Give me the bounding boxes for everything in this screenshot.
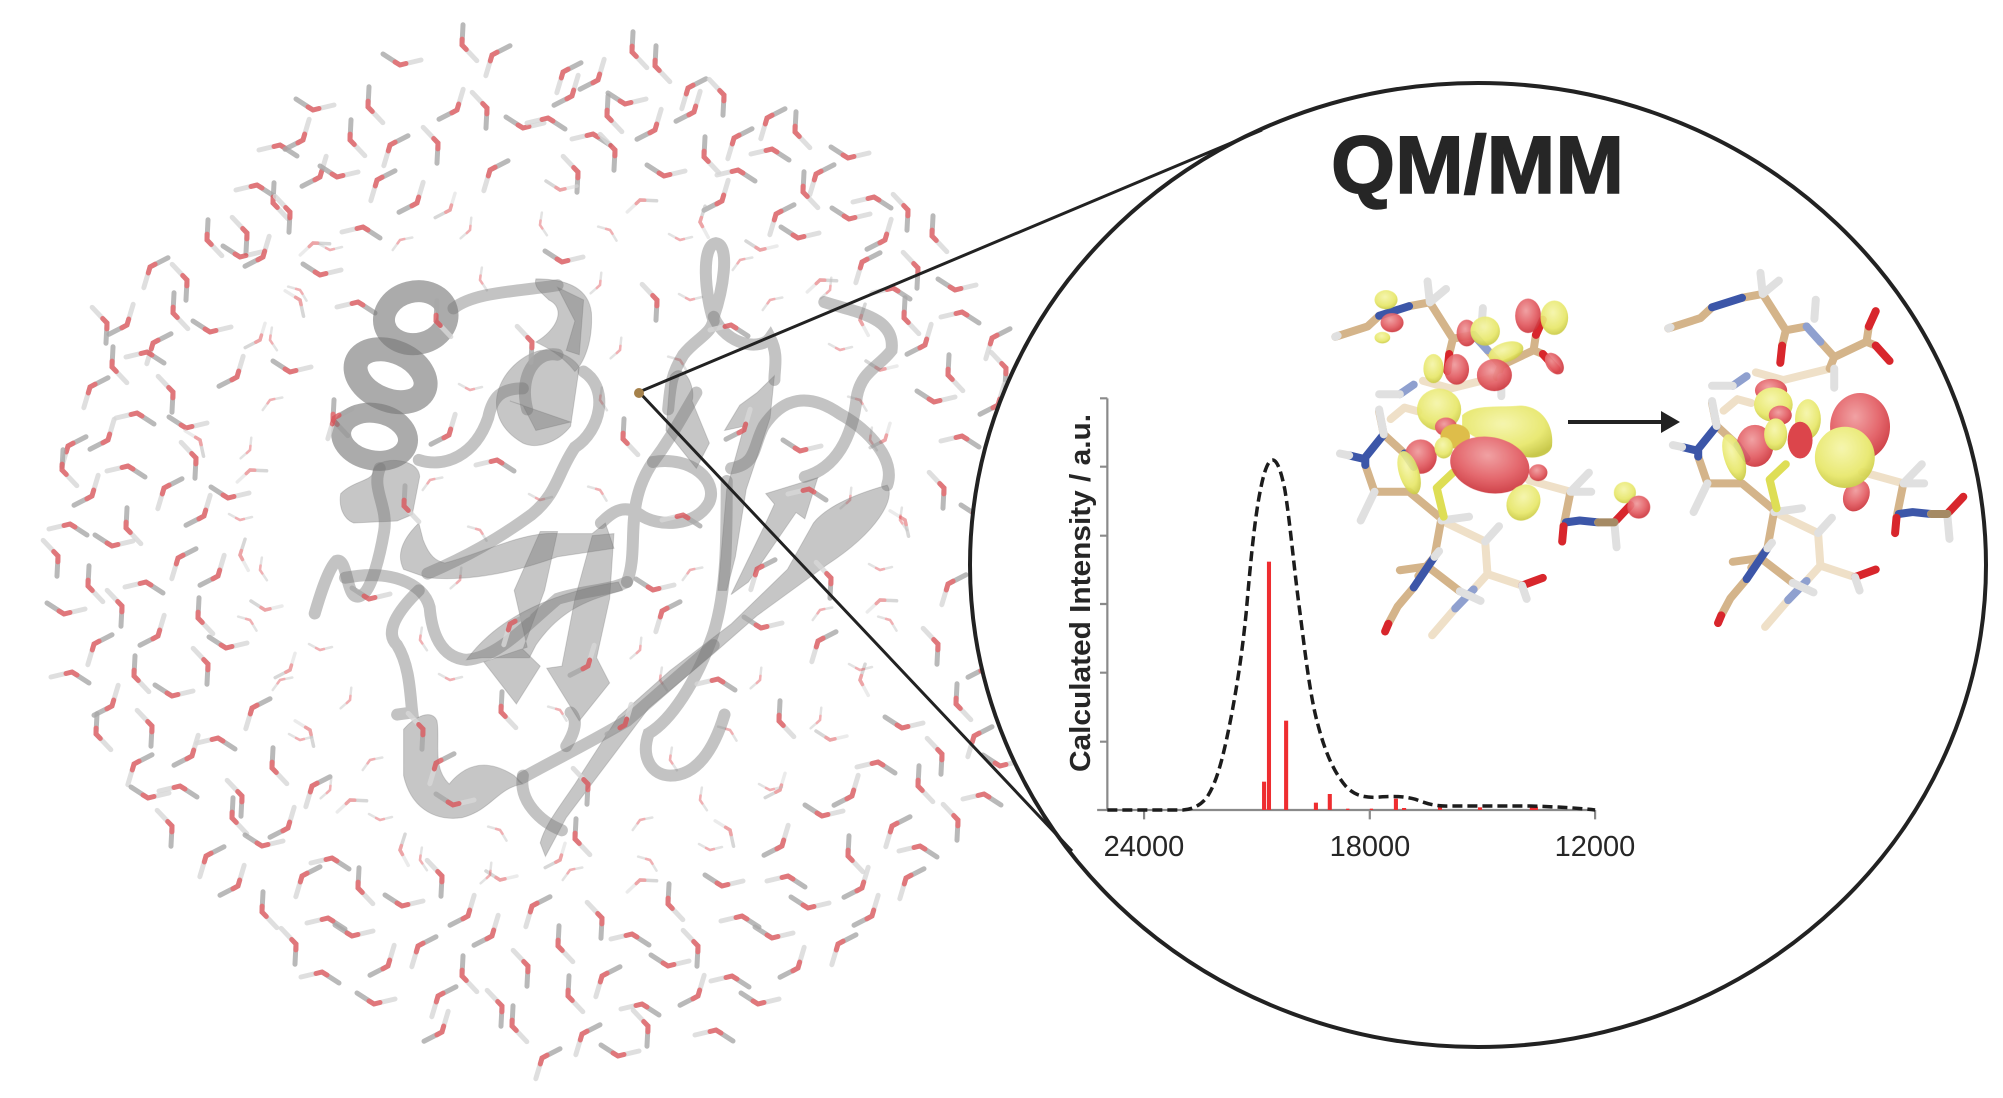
orbital lobes	[1717, 379, 1890, 514]
water shell: mid-depth molecules	[182, 181, 915, 896]
zoom connector lines	[634, 130, 1262, 851]
molecule: final state with orbitals	[1668, 273, 1963, 627]
x axis labels: 18000	[1330, 831, 1410, 863]
connecting loops	[315, 243, 892, 830]
stick structure	[1668, 273, 1963, 627]
orbital lobes	[1375, 290, 1650, 524]
icon: QM region dot	[634, 388, 644, 398]
zoom lens circle	[970, 83, 1986, 1047]
x axis labels: 12000	[1555, 831, 1635, 863]
water shell: faint inner molecules	[229, 213, 910, 885]
dashed broadened curve	[1107, 460, 1595, 810]
helices	[336, 284, 454, 467]
red stick spectrum	[1262, 562, 1538, 810]
molecule: initial state with orbitals	[1335, 281, 1650, 635]
x axis labels	[1104, 831, 1635, 863]
stick structure	[1335, 281, 1630, 635]
beta strands	[340, 279, 889, 856]
arrow	[1568, 411, 1680, 433]
water molecules over the protein	[324, 251, 840, 857]
x axis labels: 24000	[1104, 831, 1184, 863]
spectrum chart	[1065, 398, 1635, 863]
axes	[1097, 398, 1595, 819]
water shell: outer molecules	[38, 25, 1035, 1082]
y axis label: Calculated Intensity / a.u.	[1065, 414, 1097, 772]
protein ribbon	[315, 243, 892, 856]
title: QM/MM	[1331, 120, 1624, 211]
